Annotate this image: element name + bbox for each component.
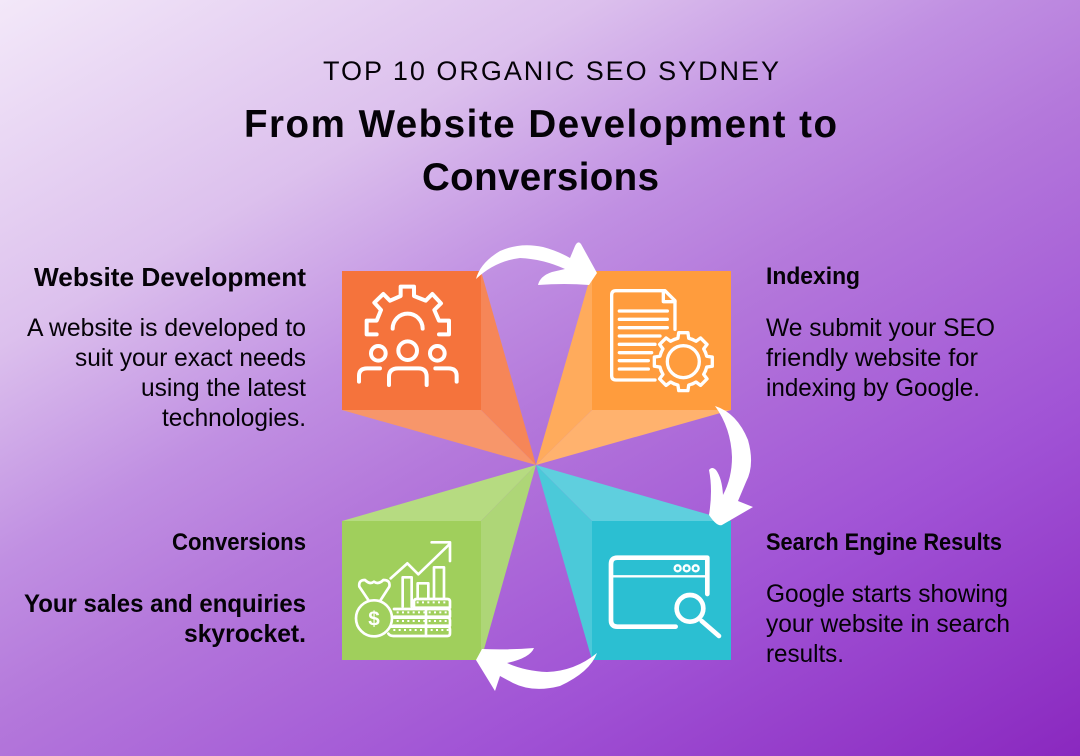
text block: indexing: friendly website for (766, 344, 978, 372)
text block: indexing: We submit your SEO (766, 314, 995, 342)
icon: document with gear (612, 291, 712, 391)
text block: search engine results: Search Engine Results (766, 529, 1002, 556)
panel: website development block (342, 271, 536, 465)
text block: website development: suit your exact needs (75, 344, 306, 372)
text block: search engine results (766, 529, 1010, 668)
text block: website development (27, 262, 306, 432)
text block: indexing: Indexing (766, 263, 860, 290)
text block: indexing: indexing by Google. (766, 374, 980, 402)
text block: website development: A website is developed to (27, 314, 306, 342)
arrow: indexing to search results (709, 406, 753, 525)
panel: search engine results block (536, 465, 731, 660)
text block: search engine results: Google starts showing (766, 580, 1008, 608)
text block: indexing (766, 263, 995, 402)
text block: conversions: skyrocket. (184, 620, 306, 648)
text block: website development: technologies. (162, 404, 306, 432)
panel: indexing block (536, 271, 731, 465)
arrow: development to indexing (476, 242, 597, 285)
text block: search engine results: results. (766, 640, 844, 668)
icon: money bag and growth chart (356, 542, 450, 636)
icon: team with gear (359, 287, 457, 385)
icon: money bag and growth chart: $ (368, 608, 380, 631)
main heading (244, 103, 837, 199)
text block: conversions (24, 529, 306, 648)
eyebrow title: TOP 10 ORGANIC SEO SYDNEY (323, 56, 779, 86)
text block: website development: using the latest (141, 374, 306, 402)
main heading: Conversions (422, 156, 659, 199)
text block: search engine results: your website in search (766, 610, 1010, 638)
panel: conversions block (342, 465, 536, 660)
text block: conversions: Your sales and enquiries (24, 590, 306, 618)
icon: browser window with magnifier (611, 558, 719, 636)
main heading: From Website Development to (244, 103, 837, 146)
text block: website development: Website Development (34, 262, 306, 292)
text block: conversions: Conversions (172, 529, 306, 556)
arrow: search results to conversions (476, 648, 597, 691)
